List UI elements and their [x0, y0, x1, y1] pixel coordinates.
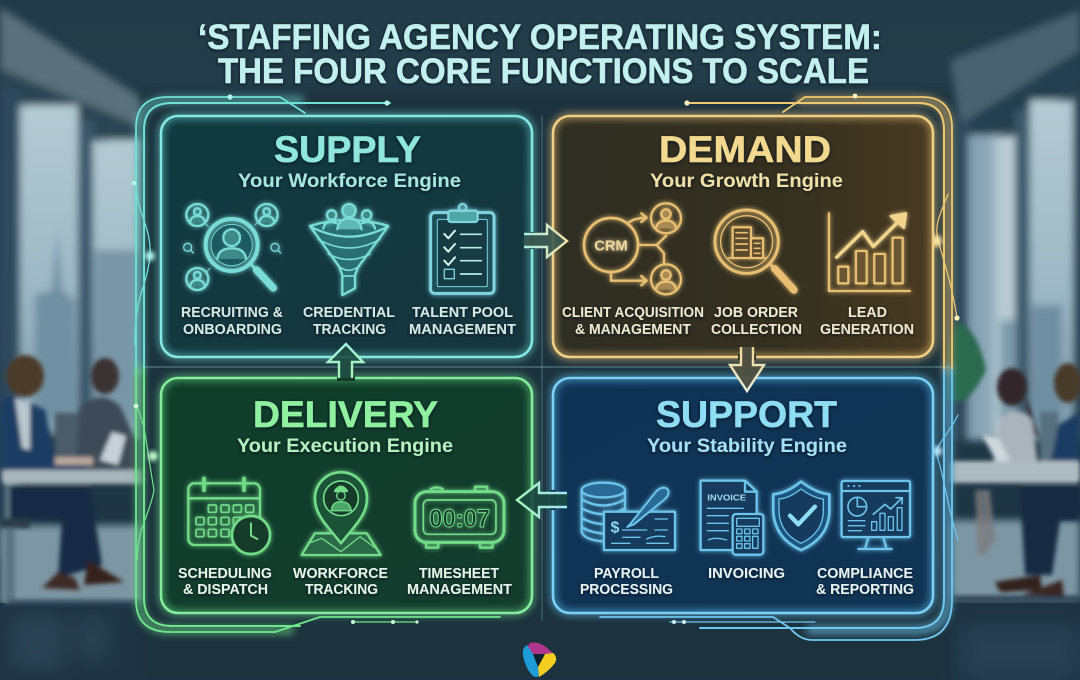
- background: central dark veil: [140, 92, 950, 680]
- demand labels: [562, 305, 914, 338]
- demand labels: JOB ORDER: [714, 305, 799, 321]
- arrow: delivery to supply: [328, 344, 363, 381]
- arrow: supply to demand: [524, 225, 567, 257]
- demand heading: DEMAND: [659, 129, 831, 170]
- support labels: COMPLIANCE: [817, 566, 913, 582]
- title: THE FOUR CORE FUNCTIONS TO SCALE: [218, 52, 869, 91]
- delivery heading: [237, 394, 453, 457]
- icon: talent pool clipboard: [431, 204, 494, 293]
- frame: teal upper left: [132, 94, 390, 370]
- icon: reporting dashboard monitor: [842, 481, 910, 549]
- demand heading: Your Growth Engine: [650, 171, 843, 192]
- delivery panel box: [161, 378, 532, 613]
- panel: supply: [161, 116, 532, 357]
- supply labels: TRACKING: [313, 322, 386, 338]
- support heading: SUPPORT: [656, 394, 837, 435]
- demand labels: COLLECTION: [711, 322, 802, 338]
- panel: demand: [553, 116, 933, 357]
- arrow: support to delivery: [517, 483, 567, 517]
- demand labels: GENERATION: [820, 322, 914, 338]
- frame: gold upper right: [684, 94, 960, 370]
- supply heading: [238, 129, 461, 192]
- demand heading: [650, 129, 843, 192]
- frame: blue lower right: [600, 370, 958, 640]
- demand panel box: [553, 116, 933, 357]
- icon: CRM network: [584, 203, 681, 294]
- background: right office windows and ceiling: [950, 10, 1080, 440]
- background: right meeting attendees and plant: [944, 322, 1080, 601]
- delivery labels: TIMESHEET: [419, 566, 499, 582]
- background: left office windows and ceiling: [0, 7, 145, 560]
- icon: job order magnifier: [715, 210, 794, 290]
- icon: invoice and calculator: INVOICE: [707, 493, 746, 503]
- icon: CRM network: CRM: [594, 238, 628, 254]
- delivery labels: SCHEDULING: [178, 566, 272, 582]
- icon: scheduling calendar and clock: [188, 478, 270, 554]
- panel: support: [553, 378, 933, 613]
- panel: delivery: [161, 378, 532, 613]
- delivery labels: & DISPATCH: [183, 582, 268, 598]
- supply panel box: [161, 116, 532, 357]
- support labels: PAYROLL: [594, 566, 659, 582]
- frame: green lower left: [134, 370, 500, 632]
- delivery labels: MANAGEMENT: [407, 582, 512, 598]
- supply labels: RECRUITING &: [181, 305, 284, 321]
- icon: footer logo: [523, 642, 556, 677]
- support labels: INVOICING: [708, 566, 785, 582]
- supply labels: CREDENTIAL: [303, 305, 395, 321]
- support labels: PROCESSING: [580, 582, 673, 598]
- frame: central cross lines: [143, 116, 950, 620]
- supply heading: SUPPLY: [274, 129, 421, 170]
- support heading: Your Stability Engine: [647, 436, 847, 457]
- supply labels: ONBOARDING: [183, 322, 282, 338]
- delivery heading: Your Execution Engine: [237, 436, 453, 457]
- support labels: [580, 566, 914, 598]
- background: left meeting attendees: [0, 355, 147, 605]
- icon: timesheet digital clock: [415, 487, 504, 548]
- delivery heading: DELIVERY: [253, 394, 438, 435]
- icon: invoice and calculator: [701, 481, 763, 555]
- title: [198, 18, 882, 91]
- delivery labels: WORKFORCE: [293, 566, 388, 582]
- icon: timesheet digital clock: 00:07: [429, 506, 490, 533]
- icon: payroll coins and cheque: $: [611, 519, 620, 536]
- icon: lead generation chart: [829, 213, 910, 291]
- icon: recruiting magnifier: [184, 204, 281, 290]
- supply labels: MANAGEMENT: [409, 322, 516, 338]
- support labels: & REPORTING: [816, 582, 914, 598]
- icon: payroll coins and cheque: [582, 483, 675, 550]
- delivery labels: TRACKING: [305, 582, 378, 598]
- support panel box: [553, 378, 933, 613]
- demand labels: LEAD: [848, 305, 887, 321]
- demand labels: CLIENT ACQUISITION: [562, 305, 704, 321]
- demand labels: & MANAGEMENT: [575, 322, 691, 338]
- outer circuit frame: [132, 94, 960, 640]
- supply labels: [181, 305, 516, 338]
- title: ‘STAFFING AGENCY OPERATING SYSTEM:: [198, 18, 882, 57]
- support heading: [647, 394, 847, 457]
- delivery labels: [178, 566, 512, 598]
- background: floor: [0, 520, 1080, 680]
- supply heading: Your Workforce Engine: [238, 171, 461, 192]
- icon: compliance shield: [773, 482, 829, 550]
- supply labels: TALENT POOL: [412, 305, 513, 321]
- icon: credential funnel: [310, 204, 388, 295]
- arrow: demand to support: [730, 347, 764, 391]
- icon: workforce tracking pin: [302, 472, 381, 555]
